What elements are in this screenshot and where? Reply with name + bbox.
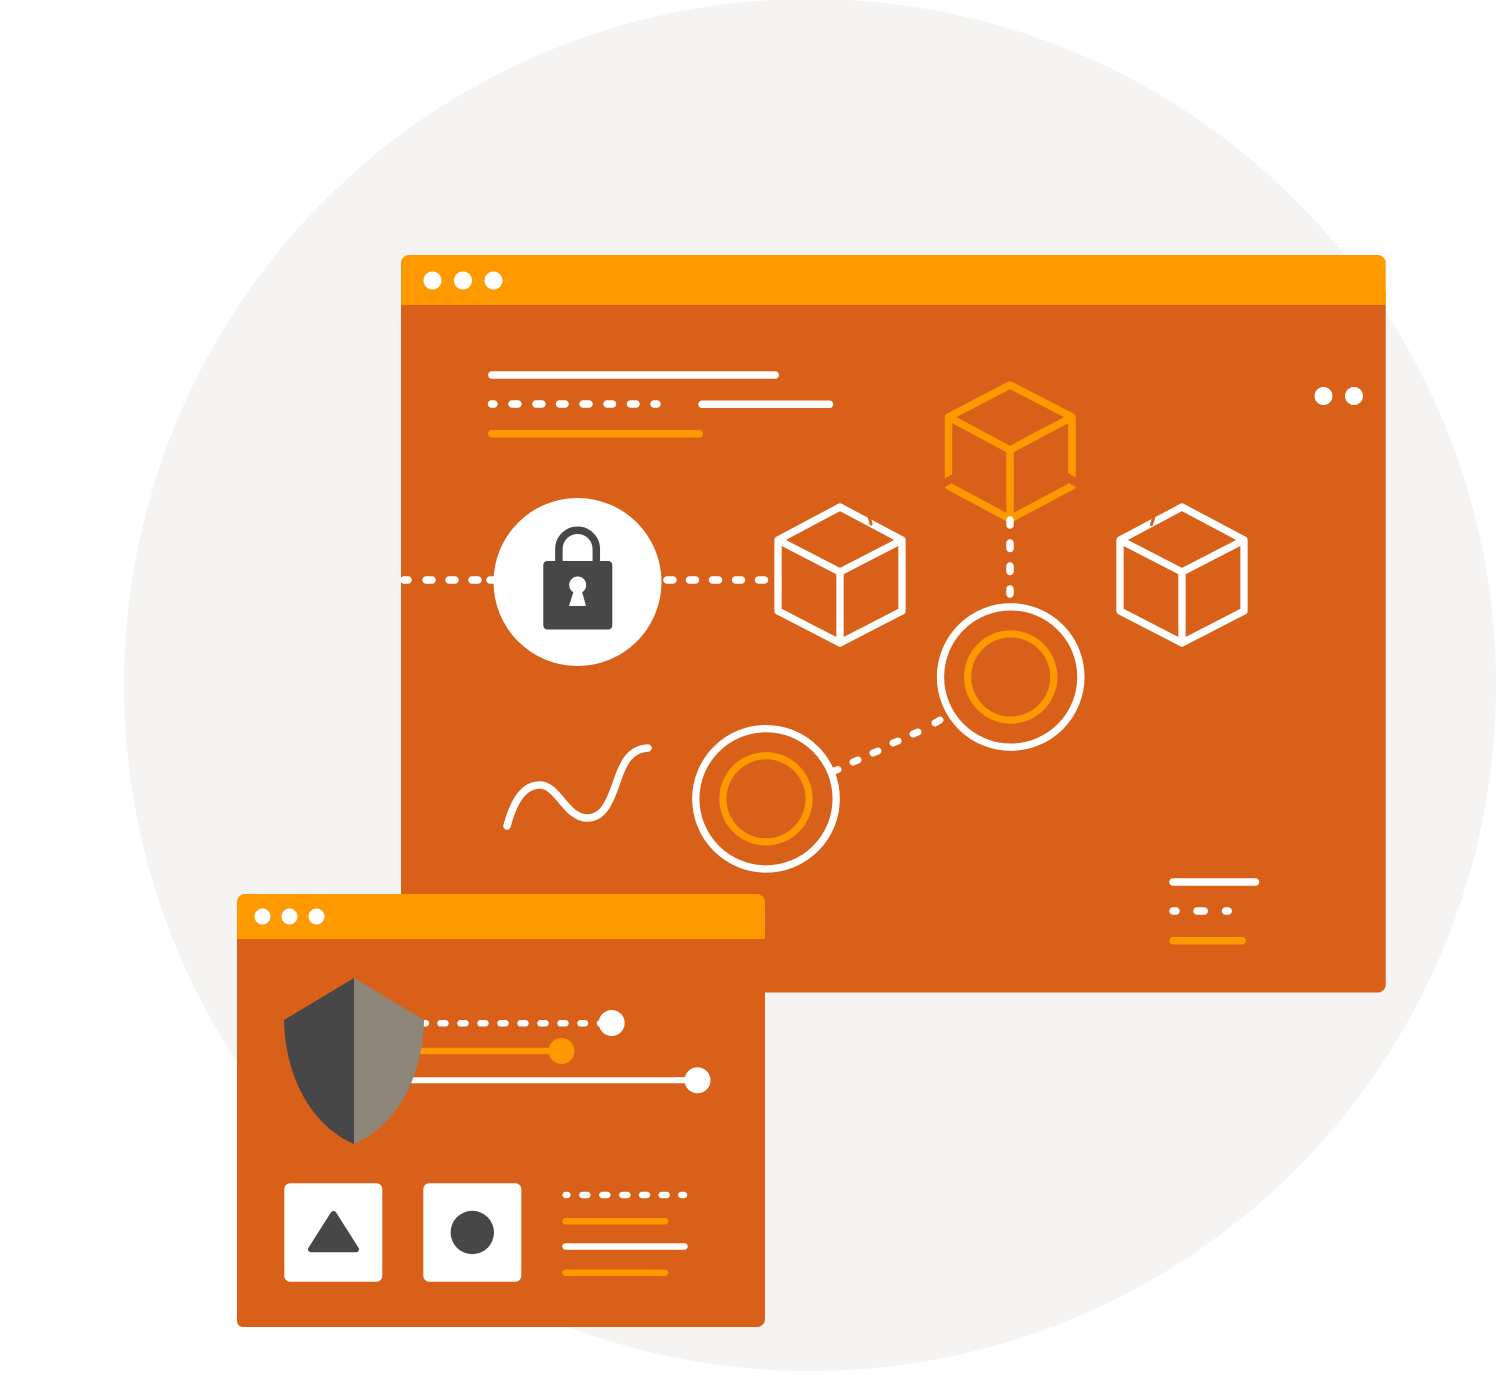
icon: right white cube <box>1120 507 1244 643</box>
white tile with circle <box>423 1183 521 1282</box>
lower right text lines <box>1173 882 1256 941</box>
large window control dots <box>424 272 502 290</box>
white tile with triangle <box>284 1183 382 1282</box>
icon: left white cube <box>778 507 902 643</box>
dotted connector: left to lock <box>404 576 494 584</box>
slider: orange <box>415 1038 574 1064</box>
top right dots <box>1314 387 1363 405</box>
wave line <box>507 748 648 826</box>
panel: small browser window <box>237 894 765 1327</box>
icon: orange cube <box>943 385 1078 519</box>
icon: padlock <box>494 498 662 666</box>
slider: white solid <box>405 1067 710 1093</box>
icon: upper ring <box>940 607 1081 747</box>
small window control dots <box>254 908 324 924</box>
header text lines <box>492 375 830 434</box>
large window body <box>401 290 1386 992</box>
dotted connector: orange cube to ring <box>1006 520 1014 594</box>
icon: shield <box>284 978 424 1144</box>
panel: large browser window <box>401 255 1386 992</box>
dotted connector: between rings <box>834 720 940 771</box>
small window title bar <box>237 894 765 939</box>
large window title bar <box>401 255 1386 305</box>
dotted connector: lock to cube <box>667 576 764 584</box>
small window text lines <box>566 1195 684 1273</box>
icon: lower ring <box>696 729 836 869</box>
small window body <box>237 925 765 1327</box>
slider: white dotted <box>425 1010 625 1036</box>
